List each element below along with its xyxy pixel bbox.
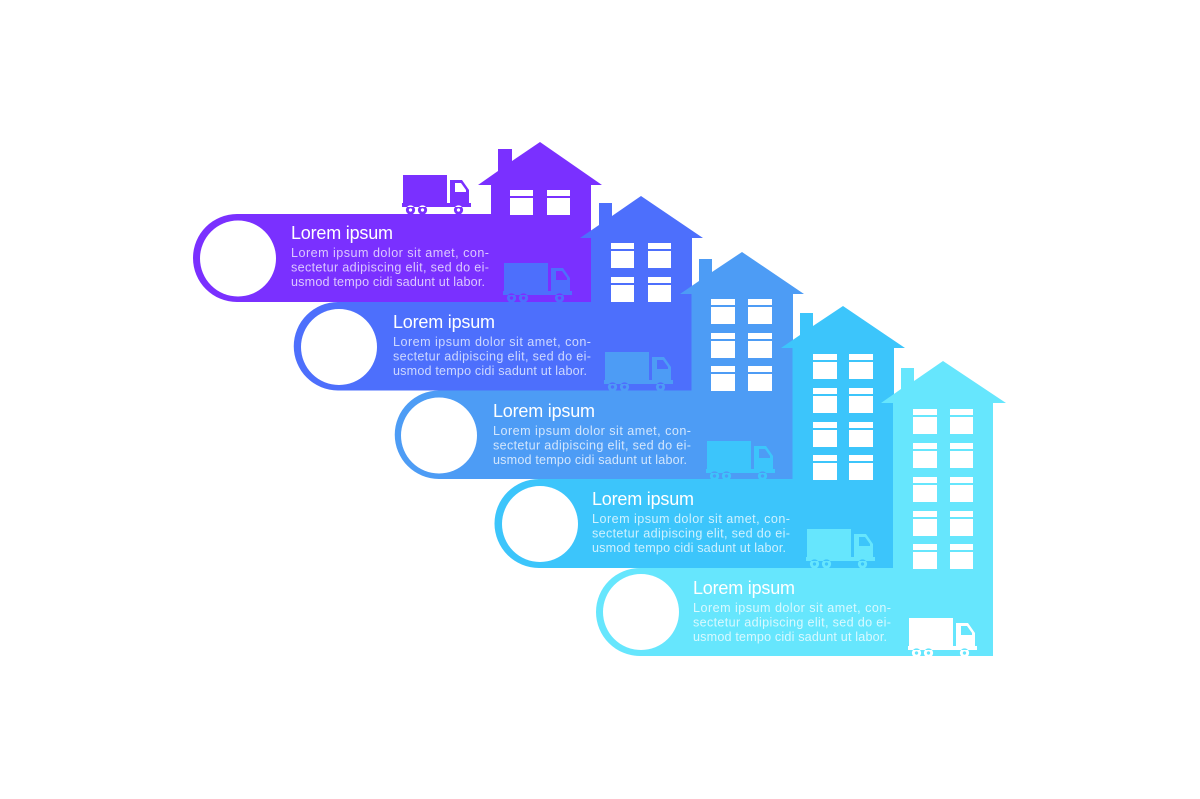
- band and house 1: [193, 142, 602, 302]
- text block 5: usmod tempo cidi sadunt ut labor.: [693, 630, 887, 644]
- band and house 5: [596, 361, 1006, 656]
- image circle 2: [301, 309, 377, 385]
- text block 3: usmod tempo cidi sadunt ut labor.: [493, 453, 687, 467]
- band and house 3: [395, 252, 804, 479]
- windows of house 4: [813, 354, 873, 480]
- text block 4: sectetur adipiscing elit, sed do ei-: [592, 526, 790, 540]
- windows of house 1: [510, 190, 570, 215]
- heading 5: Lorem ipsum: [693, 578, 795, 598]
- icon: truck on roofline: [402, 175, 471, 215]
- text block 4: usmod tempo cidi sadunt ut labor.: [592, 541, 786, 555]
- band and house 2: [294, 196, 703, 390]
- heading 1: Lorem ipsum: [291, 223, 393, 243]
- text block 1: Lorem ipsum dolor sit amet, con-: [291, 246, 489, 260]
- icon: truck 3: [604, 352, 673, 392]
- icon: truck 5: [806, 529, 875, 569]
- text block 1: sectetur adipiscing elit, sed do ei-: [291, 260, 489, 274]
- text block 2: Lorem ipsum dolor sit amet, con-: [393, 335, 591, 349]
- text block 2: [393, 335, 591, 378]
- text block 4: Lorem ipsum dolor sit amet, con-: [592, 512, 790, 526]
- panel: step 4: [495, 306, 905, 569]
- heading 3: Lorem ipsum: [493, 401, 595, 421]
- heading 2: Lorem ipsum: [393, 312, 495, 332]
- image circle 3: [401, 398, 477, 474]
- text block 1: usmod tempo cidi sadunt ut labor.: [291, 275, 485, 289]
- panel: step 2: [294, 196, 703, 392]
- text block 3: Lorem ipsum dolor sit amet, con-: [493, 424, 691, 438]
- text block 2: usmod tempo cidi sadunt ut labor.: [393, 364, 587, 378]
- text block 5: sectetur adipiscing elit, sed do ei-: [693, 616, 891, 630]
- panel: step 1: [193, 142, 602, 303]
- icon: truck 2: [503, 263, 572, 303]
- text block 5: Lorem ipsum dolor sit amet, con-: [693, 601, 891, 615]
- panel: step 3: [395, 252, 804, 481]
- image circle 1: [200, 220, 276, 296]
- text block 1: [291, 246, 489, 289]
- text block 5: [693, 601, 891, 644]
- icon: truck 4: [706, 441, 775, 481]
- text block 3: [493, 424, 691, 467]
- image circle 4: [502, 486, 578, 562]
- icon: truck 6: [908, 618, 977, 658]
- heading 4: Lorem ipsum: [592, 489, 694, 509]
- band and house 4: [495, 306, 905, 568]
- text block 3: sectetur adipiscing elit, sed do ei-: [493, 438, 691, 452]
- windows of house 2: [611, 243, 671, 302]
- image circle 5: [603, 574, 679, 650]
- panel: step 5: [596, 361, 1006, 658]
- windows of house 5: [913, 409, 973, 569]
- text block 2: sectetur adipiscing elit, sed do ei-: [393, 350, 591, 364]
- windows of house 3: [711, 299, 772, 391]
- text block 4: [592, 512, 790, 555]
